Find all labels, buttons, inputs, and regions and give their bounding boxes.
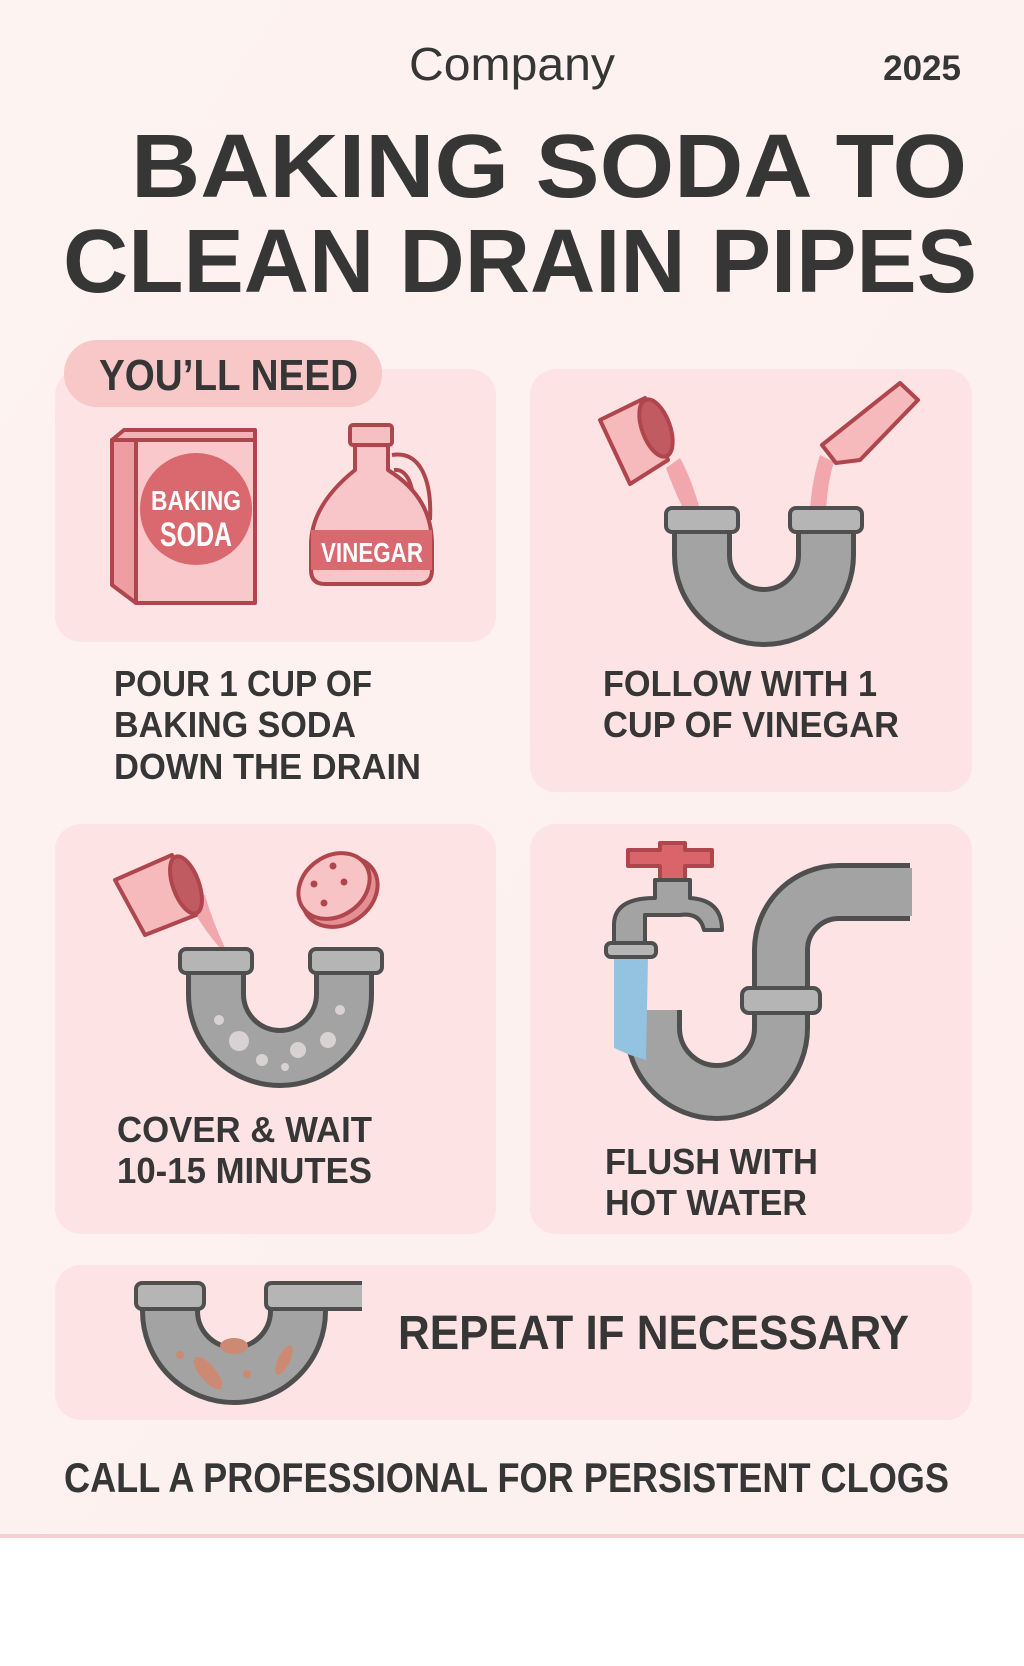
title: CLEAN DRAIN PIPES <box>63 212 977 312</box>
title: BAKING SODA TO <box>131 117 967 217</box>
text: step 4: HOT WATER <box>605 1182 807 1223</box>
header: company: Company <box>409 38 615 90</box>
text: step 1: POUR 1 CUP OF <box>114 663 372 704</box>
icon: u-pipe <box>666 508 862 617</box>
pill: you'll need <box>64 340 382 407</box>
header: year: 2025 <box>883 49 961 88</box>
panel: step 2 <box>530 369 972 792</box>
text: step 4: FLUSH WITH <box>605 1141 818 1182</box>
icon: pouring cups <box>600 383 918 510</box>
title <box>63 117 977 312</box>
icon: s-pipe <box>653 892 912 1092</box>
icon: vinegar jug <box>311 425 432 584</box>
panel: step 3 <box>55 824 496 1234</box>
text: step 2 <box>603 663 899 745</box>
text: step 1: DOWN THE DRAIN <box>114 746 421 787</box>
icon: u-pipe with residue <box>180 949 382 1071</box>
text: step 3: 10-15 MINUTES <box>117 1150 372 1191</box>
icon: faucet with water <box>606 843 722 1060</box>
icon: dirty u-pipe <box>136 1283 362 1393</box>
pill: you'll need: YOU’LL NEED <box>99 351 358 400</box>
text: step 4 <box>605 1141 818 1223</box>
panel: you'll need <box>55 340 496 642</box>
icon: vinegar jug: VINEGAR <box>321 537 423 568</box>
text: step 1: BAKING SODA <box>114 704 356 745</box>
text: step 2: CUP OF VINEGAR <box>603 704 899 745</box>
text: repeat: REPEAT IF NECESSARY <box>398 1307 909 1360</box>
text: step 2: FOLLOW WITH 1 <box>603 663 877 704</box>
icon: baking soda box: SODA <box>160 516 232 554</box>
icon: baking soda box <box>112 430 255 603</box>
icon: baking soda box: BAKING <box>151 485 241 516</box>
text: step 3: COVER & WAIT <box>117 1109 372 1150</box>
text: step 1 <box>114 663 421 787</box>
panel: repeat <box>55 1265 972 1420</box>
panel: step 4 <box>530 824 972 1234</box>
text: step 3 <box>117 1109 372 1191</box>
icon: cup and stopper <box>115 840 391 948</box>
